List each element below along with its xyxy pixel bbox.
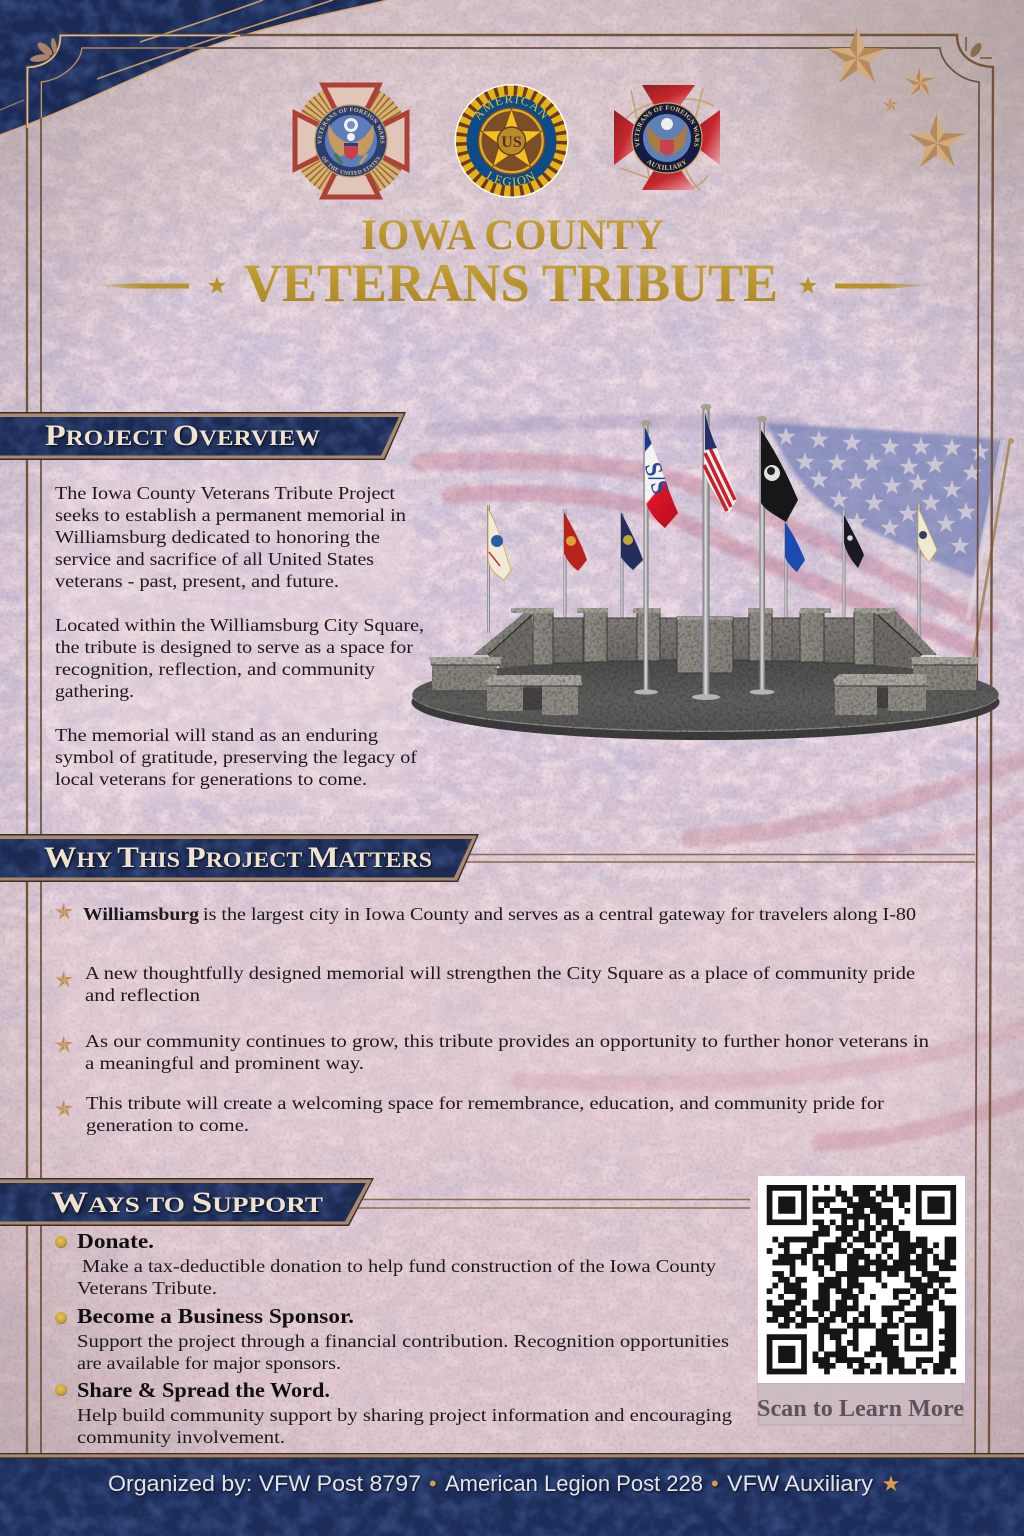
item: business sponsor: Support the project through a financial contribution. Recognition opportunities xyxy=(77,1331,729,1351)
footer band: VFW Auxiliary xyxy=(727,1471,873,1496)
logo: VFW Auxiliary: VETERANS OF FOREIGN WARS xyxy=(634,106,700,148)
item: share and spread xyxy=(55,1378,732,1447)
overview text xyxy=(55,483,424,789)
logo: American Legion: LEGION xyxy=(486,171,536,186)
title: IOWA COUNTY xyxy=(361,212,664,259)
ribbon: why this project matters: WHY THIS PROJECT MATTERS xyxy=(44,841,432,874)
bullet 3 xyxy=(55,1031,929,1073)
circular granite base xyxy=(412,658,1000,740)
paragraph 1: seeks to establish a permanent memorial in xyxy=(55,505,406,525)
title: VETERANS TRIBUTE xyxy=(244,253,778,313)
item: business sponsor xyxy=(55,1304,729,1373)
paragraph 1: veterans - past, present, and future. xyxy=(55,571,339,591)
paragraph 3: The memorial will stand as an enduring xyxy=(55,725,378,745)
flag: Navy xyxy=(621,512,643,570)
bullet 4 xyxy=(55,1093,884,1135)
stone wall xyxy=(473,608,937,673)
footer band: • xyxy=(711,1471,719,1496)
paragraph 2 xyxy=(55,615,424,701)
bullet 2: and reflection xyxy=(85,985,200,1005)
paragraph 3 xyxy=(55,725,417,789)
logo: VFW xyxy=(292,82,410,200)
paragraph 2: the tribute is designed to serve as a space for xyxy=(55,637,413,657)
paragraph 2: gathering. xyxy=(55,681,134,701)
item: share and spread: community involvement. xyxy=(77,1427,285,1447)
logo: VFW Auxiliary: AUXILIARY xyxy=(646,159,686,170)
paragraph 2: recognition, reflection, and community xyxy=(55,659,375,679)
bullet 3: a meaningful and prominent way. xyxy=(85,1053,364,1073)
bullet 2: A new thoughtfully designed memorial will strengthen the City Square as a place of community pride xyxy=(85,963,915,983)
small rear flagpoles xyxy=(487,504,920,638)
bullet 1: is the largest city in Iowa County and serves as a central gateway for travelers along I-80 xyxy=(203,904,916,924)
corner flourish: left xyxy=(30,38,58,63)
logo: VFW Auxiliary xyxy=(614,85,720,190)
QR code panel xyxy=(757,1176,965,1425)
footer band xyxy=(0,1453,1024,1536)
item: business sponsor: Become a Business Sponsor. xyxy=(77,1304,354,1328)
title ornament: right star and line xyxy=(799,276,935,294)
footer band: Organized by: VFW Post 8797 xyxy=(108,1471,421,1496)
item: share and spread: Help build community support by sharing project information and encouraging xyxy=(77,1405,732,1425)
benches xyxy=(429,657,980,715)
flag: Iowa: S/S xyxy=(639,459,673,498)
support list xyxy=(55,1229,732,1447)
ribbon: project overview: PROJECT OVERVIEW xyxy=(45,419,320,452)
paragraph 1: service and sacrifice of all United States xyxy=(55,549,374,569)
item: business sponsor: are available for major sponsors. xyxy=(77,1353,341,1373)
section lines: ways to support xyxy=(355,1200,750,1208)
item: share and spread: Share & Spread the Word. xyxy=(77,1378,330,1402)
paragraph 3: local veterans for generations to come. xyxy=(55,769,367,789)
footer band: American Legion Post 228 xyxy=(445,1471,703,1496)
flag: Army xyxy=(488,508,511,580)
paragraph 1: The Iowa County Veterans Tribute Project xyxy=(55,483,395,503)
bullet 3: As our community continues to grow, this tribute provides an opportunity to further honor veterans in xyxy=(85,1031,929,1051)
item: donate xyxy=(55,1229,716,1298)
paragraph 1 xyxy=(55,483,406,591)
paragraph 3: symbol of gratitude, preserving the legacy of xyxy=(55,747,417,767)
top-left navy swoosh xyxy=(0,0,388,135)
logo: VFW: VETERANS OF FOREIGN WARS xyxy=(318,108,384,144)
logo: American Legion: US xyxy=(501,134,522,151)
corner flourish: right xyxy=(965,37,992,59)
background flag: waving stripes xyxy=(420,422,1024,1142)
decorative bronze stars xyxy=(828,27,966,167)
logo: American Legion: AMERICAN xyxy=(475,94,549,120)
main flagpoles xyxy=(634,404,774,700)
bullet 2 xyxy=(55,963,915,1005)
bullet 4: This tribute will create a welcoming space for remembrance, education, and community pride for xyxy=(86,1093,884,1113)
flag: Iowa xyxy=(639,427,678,528)
bullet 1: Williamsburg xyxy=(83,904,199,924)
item: donate: Donate. xyxy=(77,1229,154,1253)
flag: Air Force xyxy=(785,522,805,572)
flag: United States xyxy=(704,412,737,513)
QR code panel: Scan to Learn More xyxy=(757,1396,964,1422)
flag: POW-MIA xyxy=(761,430,798,522)
paragraph 2: Located within the Williamsburg City Square, xyxy=(55,615,424,635)
flag: Space Force xyxy=(844,515,864,568)
flag: Coast Guard xyxy=(918,507,937,562)
section lines: why this project matters xyxy=(462,854,975,862)
logo: VFW: OF THE UNITED STATES xyxy=(322,156,380,175)
title xyxy=(244,212,778,313)
ribbon: ways to support xyxy=(0,1178,374,1226)
why list xyxy=(55,902,929,1135)
ribbon: why this project matters xyxy=(0,834,479,882)
ribbon: ways to support: W AYS TO SUPPORT xyxy=(51,1186,323,1219)
bullet 1 xyxy=(55,902,916,924)
memorial illustration xyxy=(412,404,1000,740)
background flag: star canton xyxy=(766,423,1014,660)
flag: Marines xyxy=(564,512,587,571)
footer band: • xyxy=(429,1471,437,1496)
paragraph 1: Williamsburg dedicated to honoring the xyxy=(55,527,380,547)
logo: American Legion xyxy=(454,84,568,198)
item: donate: Veterans Tribute. xyxy=(77,1278,217,1298)
bullet 4: generation to come. xyxy=(86,1115,249,1135)
title ornament: left line and star xyxy=(92,276,226,294)
item: donate: Make a tax-deductible donation to help fund construction of the Iowa County xyxy=(82,1256,716,1276)
ribbon: project overview xyxy=(0,412,406,460)
